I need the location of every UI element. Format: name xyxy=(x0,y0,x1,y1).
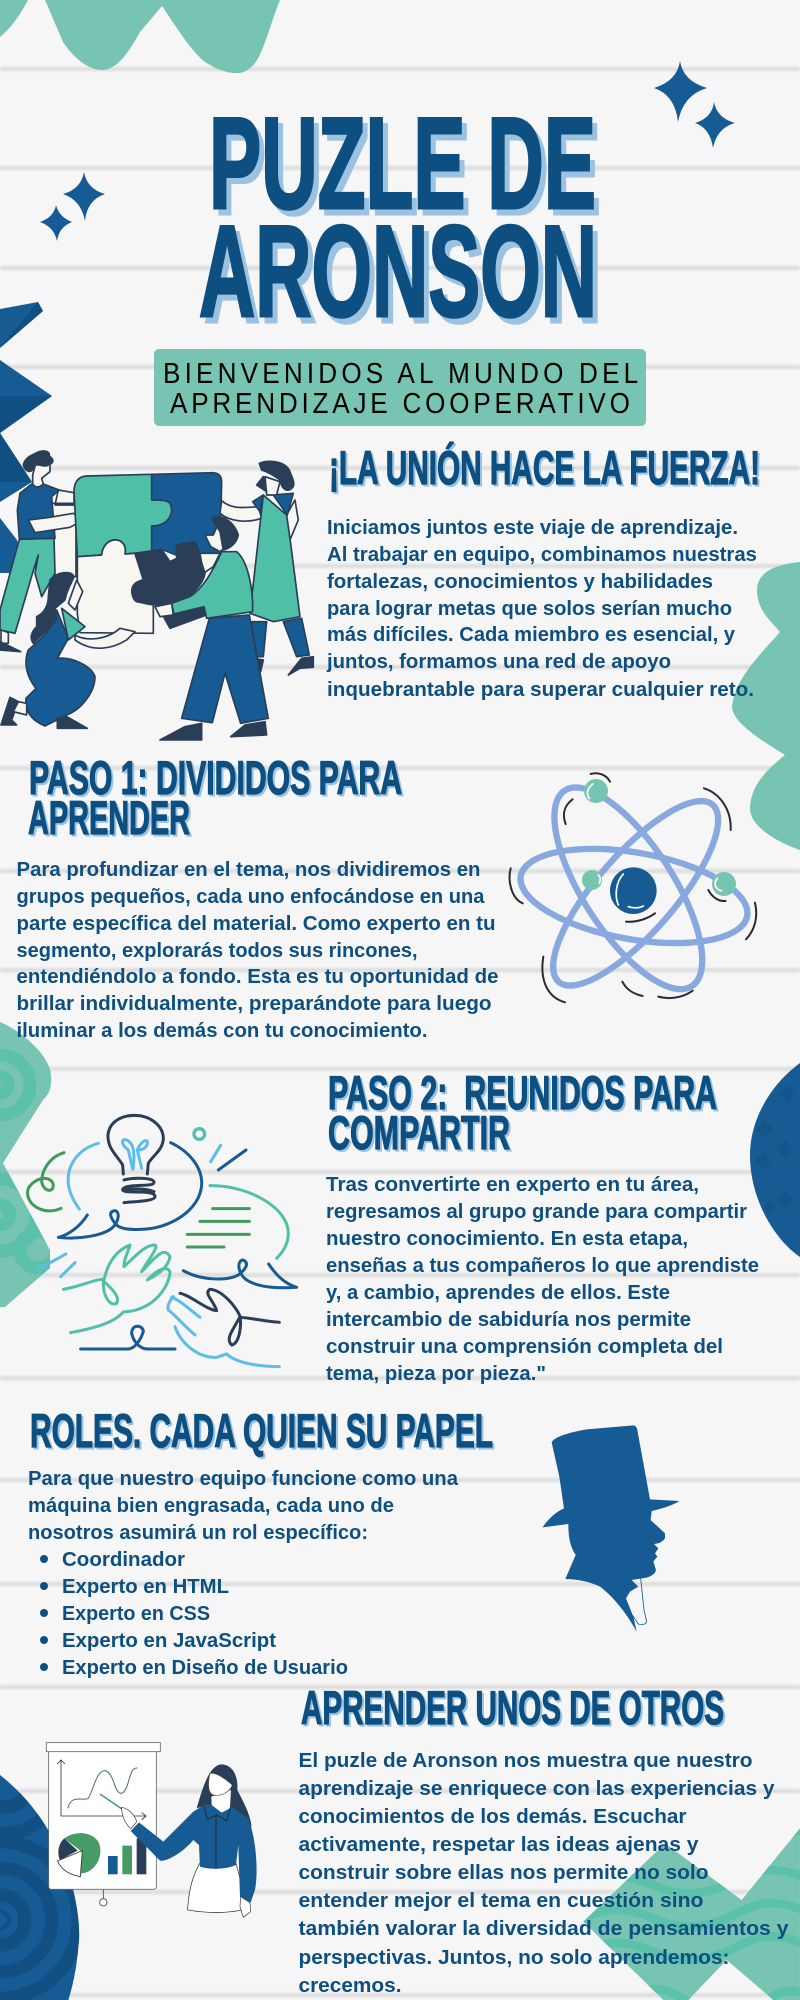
text: paso 2: regresamos al grupo grande para compartir xyxy=(326,1201,747,1223)
decoration: left teal shape xyxy=(0,1022,52,1307)
text: paso 1: entendiéndolo a fondo. Esta es tu oportunidad de xyxy=(16,966,499,988)
text: roles intro xyxy=(28,1468,459,1544)
man in the centre xyxy=(155,517,268,740)
text: paso 1: grupos pequeños, cada uno enfocándose en una xyxy=(16,886,485,908)
text: introduction: Al trabajar en equipo, combinamos nuestras xyxy=(327,544,757,566)
text: aprender unos de otros: aprendizaje se enriquece con las experiencias y xyxy=(298,1778,775,1800)
text: roles intro: nosotros asumirá un rol específico: xyxy=(28,1522,368,1544)
subtitle banner xyxy=(154,349,646,426)
text: aprender unos de otros: activamente, respetar las ideas ajenas y xyxy=(298,1834,699,1856)
text: paso 2: y, a cambio, aprendes de ellos. Este xyxy=(326,1282,670,1304)
text: paso 1: iluminar a los demás con tu conocimiento. xyxy=(16,1020,428,1042)
heading: paso 2 xyxy=(328,1066,717,1159)
list: roles: Coordinador xyxy=(62,1549,185,1571)
illustration: presenter at a flip chart xyxy=(46,1743,257,1917)
heading: paso 2: COMPARTIR xyxy=(328,1106,510,1159)
presenter xyxy=(122,1764,257,1917)
subtitle banner: APRENDIZAJE COOPERATIVO xyxy=(170,387,630,419)
puzzle xyxy=(74,473,222,633)
heading: roles: ROLES. CADA QUIEN SU PAPEL xyxy=(30,1404,493,1457)
decoration: right navy circle xyxy=(750,1063,800,1257)
text: paso 1: parte específica del material. Como experto en tu xyxy=(16,913,496,935)
text: paso 2: construir una comprensión completa del xyxy=(326,1336,723,1358)
text: paso 2: tema, pieza por pieza." xyxy=(326,1363,546,1385)
decoration: bottom left navy shape xyxy=(0,1775,80,2000)
text: paso 1: brillar individualmente, preparándote para luego xyxy=(16,993,492,1015)
text: paso 2 xyxy=(326,1174,759,1385)
icon: top hat silhouette xyxy=(543,1425,679,1632)
decoration: right teal shape xyxy=(732,562,800,850)
title xyxy=(199,90,597,344)
icon: sparkles top right xyxy=(654,61,735,148)
heading: paso 1: APRENDER xyxy=(28,791,190,844)
text: roles intro: máquina bien engrasada, cada uno de xyxy=(28,1495,394,1517)
lightbulb xyxy=(108,1115,163,1203)
list: roles: Experto en HTML xyxy=(62,1576,229,1598)
icon: atom xyxy=(510,766,756,1011)
text: aprender unos de otros: construir sobre ellas nos permite no solo xyxy=(298,1862,708,1884)
text: aprender unos de otros: también valorar la diversidad de pensamientos y xyxy=(298,1918,789,1940)
text: introduction: Iniciamos juntos este viaje de aprendizaje. xyxy=(327,517,738,539)
decoration: top teal shape xyxy=(0,0,280,73)
text: paso 2: intercambio de sabiduría nos permite xyxy=(326,1309,691,1331)
text: aprender unos de otros: crecemos. xyxy=(298,1975,402,1997)
text: paso 2: enseñas a tus compañeros lo que aprendiste xyxy=(326,1255,759,1277)
list: roles xyxy=(40,1549,348,1679)
text: introduction: para lograr metas que solos serían mucho xyxy=(327,598,732,620)
list: roles: Experto en CSS xyxy=(62,1603,210,1625)
text: paso 2: Tras convertirte en experto en tu área, xyxy=(326,1174,699,1196)
speech bubble, teal xyxy=(210,1186,288,1258)
list: roles: Experto en JavaScript xyxy=(62,1630,276,1652)
text: paso 1 xyxy=(16,859,499,1042)
text: paso 1: segmento, explorarás todos sus rincones, xyxy=(16,940,418,962)
small marks xyxy=(28,1129,246,1277)
text: paso 1: Para profundizar en el tema, nos dividiremos en xyxy=(16,859,480,881)
heading: paso 1: PASO 1: DIVIDIDOS PARA xyxy=(29,751,402,804)
list: roles: Experto en Diseño de Usuario xyxy=(62,1657,348,1679)
hand, light blue xyxy=(168,1297,279,1367)
text: aprender unos de otros: conocimientos de los demás. Escuchar xyxy=(298,1806,687,1828)
hand, teal xyxy=(63,1245,170,1333)
flip chart xyxy=(46,1743,160,1906)
text: introduction: fortalezas, conocimientos y habilidades xyxy=(327,571,713,593)
text: paso 2: nuestro conocimiento. En esta etapa, xyxy=(326,1228,688,1250)
heading: paso 1 xyxy=(28,751,402,844)
text: aprender unos de otros: El puzle de Aronson nos muestra que nuestro xyxy=(298,1750,752,1772)
text: aprender unos de otros xyxy=(298,1750,789,1997)
woman kneeling xyxy=(1,573,135,728)
speech bubble, dark blue xyxy=(58,1143,202,1238)
woman on the right xyxy=(220,461,313,675)
icon: sparkles top left xyxy=(40,172,105,241)
text: aprender unos de otros: perspectivas. Juntos, no solo aprendemos: xyxy=(298,1947,730,1969)
text: introduction: inquebrantable para superar cualquier reto. xyxy=(327,679,754,701)
text: roles intro: Para que nuestro equipo funcione como una xyxy=(28,1468,459,1490)
subtitle banner: BIENVENIDOS AL MUNDO DEL xyxy=(163,357,638,389)
text: introduction: más difíciles. Cada miembro es esencial, y xyxy=(327,624,736,646)
man on the left xyxy=(0,451,83,652)
text: introduction xyxy=(326,517,757,701)
decoration: left navy star xyxy=(0,302,52,573)
icon: lightbulb, speech bubbles and hands xyxy=(28,1115,297,1367)
text: aprender unos de otros: entender mejor el tema en cuestión sino xyxy=(298,1890,704,1912)
text: introduction: juntos, formamos una red de apoyo xyxy=(326,651,671,673)
decoration: bottom right teal zigzag xyxy=(580,1827,800,2000)
hand, dark xyxy=(180,1289,279,1345)
illustration: team assembling a puzzle xyxy=(0,451,313,740)
